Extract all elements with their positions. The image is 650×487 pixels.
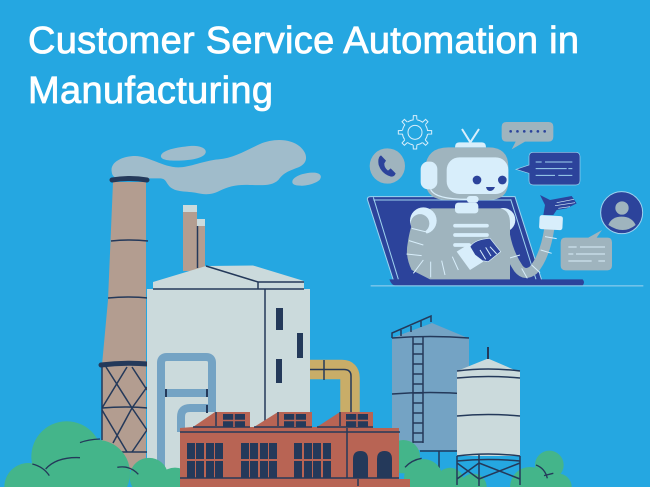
- hand left: [457, 243, 483, 270]
- chimney lattice base: [102, 366, 148, 452]
- title: Customer Service Automation in: [28, 20, 579, 62]
- smoke clouds: [112, 140, 321, 194]
- speech bubble: dark: [516, 152, 580, 185]
- tank legs: [457, 455, 520, 486]
- small twin chimneys: [183, 205, 205, 271]
- blue pipes: [161, 357, 212, 475]
- title: Manufacturing: [28, 70, 273, 112]
- laptop: [367, 197, 643, 286]
- main factory building: [147, 266, 310, 487]
- robot body: [407, 203, 515, 279]
- brick building: [180, 412, 410, 487]
- blue silo: [392, 316, 469, 468]
- icon: user avatar: [601, 192, 643, 234]
- silo ladder: [413, 337, 423, 443]
- robot head: [421, 129, 508, 203]
- tall chimney: [101, 178, 148, 470]
- icon: phone: [370, 148, 405, 184]
- arched doors: [353, 451, 392, 478]
- roof windows: [223, 414, 368, 427]
- building windows: [276, 308, 303, 383]
- brick windows: [187, 414, 392, 478]
- robot right arm: [505, 195, 577, 278]
- trees left: [4, 421, 194, 487]
- robot illustration: [367, 116, 643, 286]
- icon: gear: [398, 116, 432, 149]
- yellow pipe: [310, 360, 351, 412]
- speech bubble: grey: [561, 230, 612, 270]
- title: [28, 20, 579, 112]
- speech bubble: dots: [502, 122, 553, 149]
- trees right of brick building: [387, 440, 572, 487]
- white water tank: [457, 347, 520, 486]
